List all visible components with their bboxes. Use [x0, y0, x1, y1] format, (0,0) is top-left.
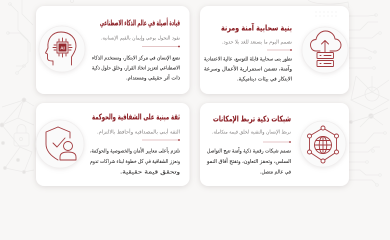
subtitle: نصمم اليوم ما يستعد للغد بلا حدود. — [222, 40, 292, 46]
body text: في عالم متصل. — [260, 170, 291, 176]
body text — [204, 56, 292, 82]
divider — [142, 139, 180, 141]
divider — [263, 141, 291, 143]
divider — [267, 49, 292, 51]
icon: AI brain — [39, 26, 85, 72]
background network and lock left — [0, 98, 34, 174]
background circuit top left — [7, 0, 74, 74]
body text: وآمنة، تضمن استمرارية الأعمال وسرعة — [204, 64, 292, 72]
body text: وتحقق قيمة حقيقية. — [120, 170, 181, 176]
body text: السلس، وتحفز التعاون، وتفتح آفاق النمو — [206, 158, 291, 165]
panel: trust and governance — [36, 103, 190, 186]
body text: نطور بنى سحابية قابلة للتوسع، عالية الاعتمادية — [204, 56, 292, 62]
body text: نضع الإنسان في مركز الابتكار، ونستخدم الذكاء — [92, 54, 180, 62]
background network right — [350, 76, 389, 127]
icon: shield with person — [36, 120, 84, 168]
body text — [92, 54, 181, 82]
icon: cloud upload server — [302, 27, 348, 73]
dot grid — [315, 11, 337, 17]
subtitle: الثقة أبني بالمصداقية وأحافظ بالالتزام. — [97, 128, 180, 136]
background circuit right bottom — [349, 132, 386, 186]
title: شبكات ذكية تربط الإمكانات — [213, 114, 291, 124]
subtitle: نقود التحول بوعي وإيمان بالقيم الإنسانية. — [101, 36, 180, 42]
body text: الابتكار في بيئات ديناميكية. — [237, 76, 292, 82]
body text: نصمم شبكات رقمية ذكية وآمنة تتيح التواصل — [207, 148, 291, 154]
panel: cloud infrastructure — [200, 6, 349, 94]
subtitle: نربط الإنسان والتقنية لخلق قيمة متكاملة. — [212, 130, 291, 136]
panel: leadership in AI — [36, 6, 190, 94]
title: قيادة أصيلة في عالم الذكاء الاصطناعي — [100, 18, 180, 28]
background circuit right top — [308, 0, 381, 69]
title: بنية سحابية آمنة ومرنة — [221, 22, 292, 32]
body text: ونعزز الشفافية في كل خطوة لبناء شراكات تدوم — [90, 158, 180, 165]
icon: AI brain: AI — [60, 45, 65, 50]
body text: ذات أثر حقيقي ومستدام. — [126, 74, 181, 82]
icon: global network — [300, 121, 346, 167]
body text — [206, 148, 291, 176]
body text: نلتزم بأعلى معايير الأمان والخصوصية والحوكمة، — [90, 146, 180, 154]
divider — [142, 46, 180, 47]
body text: الاصطناعي لتعزيز اتخاذ القرار، وخلق حلول ذكية — [92, 64, 180, 72]
body text — [90, 146, 181, 176]
panel: smart networks — [200, 103, 349, 186]
title: ثقة مبنية على الشفافية والحوكمة — [92, 112, 180, 122]
